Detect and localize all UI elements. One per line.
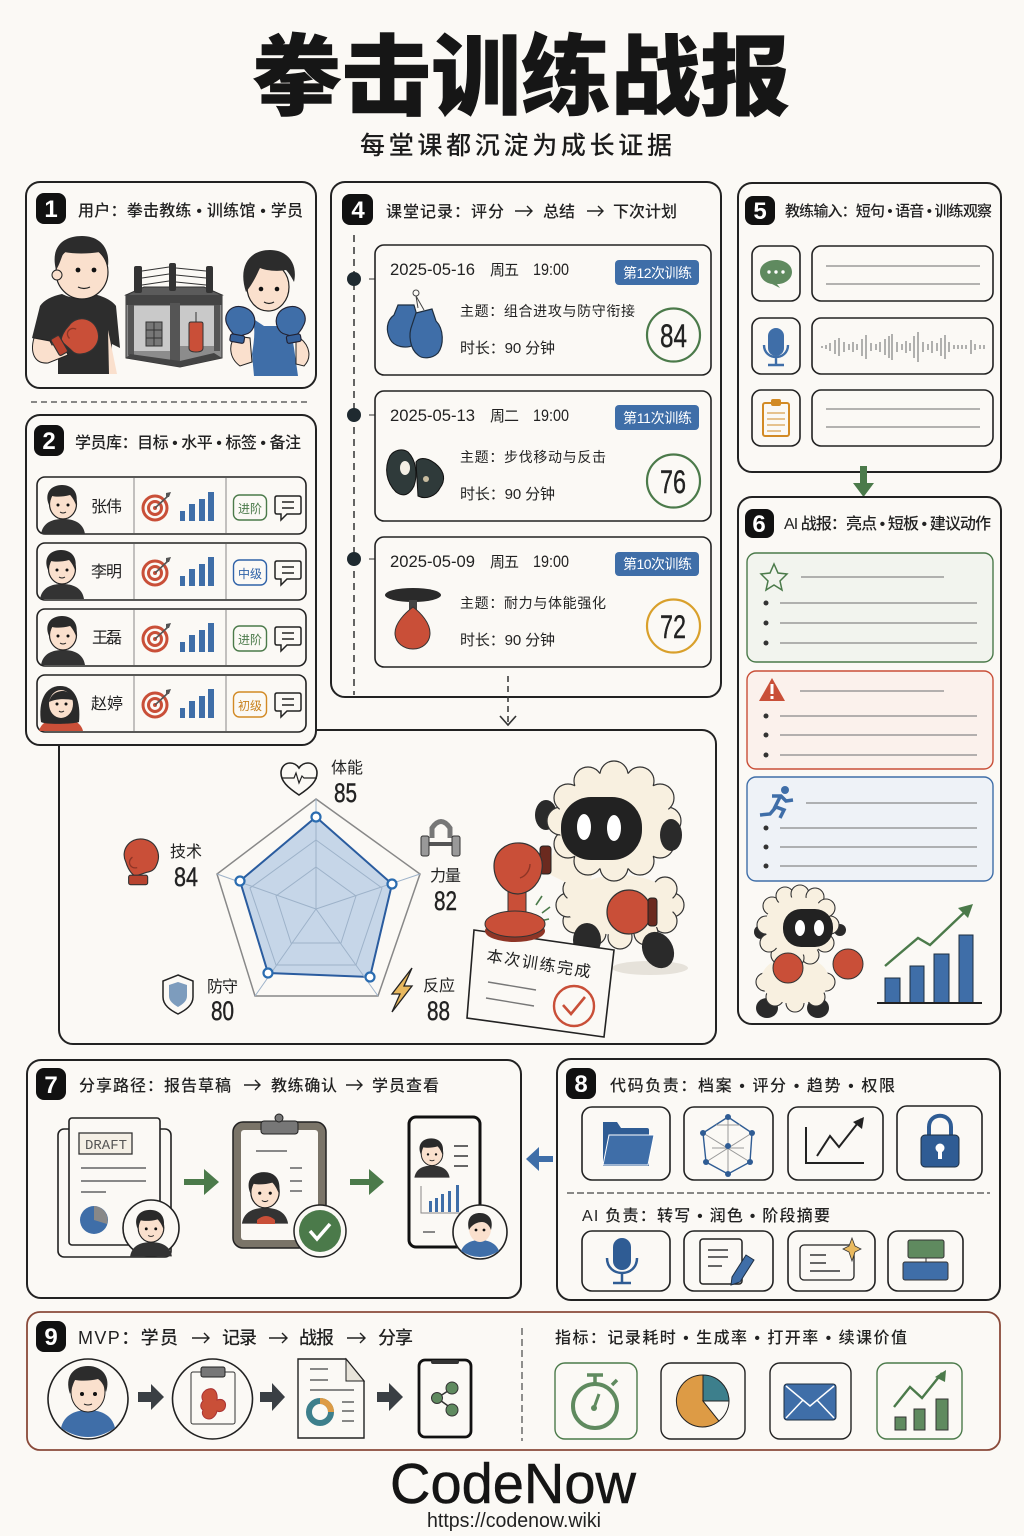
heading: MVP: 分享	[378, 1328, 413, 1348]
session card 10: 第10次训练	[623, 556, 692, 572]
badge 4: 4	[351, 197, 365, 224]
heading 1: 用户：拳击教练 • 训练馆 • 学员	[78, 201, 303, 220]
heading 6: AI 战报：亮点 • 短板 • 建议动作	[784, 515, 991, 533]
mascot: small sheep	[754, 885, 863, 1018]
panel 9: MVP and metrics	[27, 1312, 1000, 1450]
badge 9: 9	[44, 1324, 58, 1351]
student row: 赵婷: 初级	[238, 699, 262, 713]
heading: MVP	[78, 1328, 413, 1348]
badge 2: 2	[42, 428, 56, 455]
arrow	[350, 1169, 384, 1195]
chart: growth	[877, 904, 982, 1003]
badge 1	[36, 193, 66, 224]
icon: editing	[684, 1231, 773, 1291]
score 84: 84	[660, 318, 687, 354]
icon: polishing	[788, 1231, 875, 1291]
student row: 张伟	[37, 477, 306, 534]
card: weaknesses	[747, 671, 993, 769]
session card 10	[375, 537, 711, 667]
score 76: 76	[660, 464, 686, 500]
label: technique	[124, 839, 202, 892]
icon: report document	[298, 1359, 364, 1438]
student row: 赵婷: 赵婷	[91, 695, 123, 713]
heading 2: 学员库：目标 • 水平 • 标签 • 备注	[75, 433, 301, 452]
subtitle: 每堂课都沉淀为成长证据	[360, 132, 672, 160]
session card 12: 周五	[490, 262, 519, 279]
badge 1: 1	[44, 196, 58, 223]
panel 5: coach input	[738, 183, 1001, 472]
badge 5: 5	[753, 198, 767, 225]
icon: blue gloves	[387, 290, 442, 358]
heading: MVP: 战报	[299, 1328, 334, 1348]
arrow: records to radar	[500, 676, 516, 725]
student row: 李明	[37, 543, 306, 600]
badge 2	[34, 425, 64, 456]
student row: 张伟: 张伟	[91, 498, 122, 516]
badge 7: 7	[44, 1072, 58, 1099]
icon: lock	[897, 1106, 982, 1180]
session card 11: 19:00	[533, 406, 569, 425]
icon: stopwatch	[555, 1363, 637, 1439]
badge 8	[566, 1068, 596, 1099]
heading 7: 分享路径：报告草稿	[79, 1077, 231, 1095]
student row: 李明: 李明	[91, 563, 122, 581]
label: defense: 80	[211, 996, 234, 1026]
student row: 王磊	[37, 609, 306, 666]
session card 10: 周五	[490, 554, 519, 571]
student row: 赵婷	[37, 675, 306, 732]
session card 12: 时长：90 分钟	[460, 340, 555, 357]
badge 8: 8	[574, 1071, 588, 1098]
heading 7: 学员查看	[372, 1076, 439, 1095]
arrow	[184, 1169, 219, 1195]
timeline	[347, 235, 375, 695]
clipboard	[233, 1114, 346, 1257]
icon: focus pads	[387, 450, 444, 498]
icon: speed bag	[385, 588, 441, 649]
arrow	[138, 1384, 164, 1410]
badge 9	[36, 1321, 66, 1352]
label: stamina	[281, 759, 363, 808]
heading: metrics: 指标：记录耗时 • 生成率 • 打开率 • 续课价值	[555, 1329, 907, 1347]
draft document: DRAFT	[85, 1138, 127, 1154]
label: reaction	[392, 968, 455, 1026]
arrow: code to sharing	[526, 1147, 553, 1171]
arrow	[260, 1383, 285, 1411]
arrow	[377, 1383, 403, 1411]
label: stamina: 85	[334, 778, 357, 808]
label: technique: 84	[174, 862, 198, 892]
student row: 李明: 中级	[238, 566, 262, 581]
icon: microphone	[582, 1231, 670, 1291]
input: short text	[752, 246, 993, 301]
heading 5: 教练输入：短句 • 语音 • 训练观察	[785, 202, 992, 220]
icon: growth metric	[877, 1363, 962, 1439]
panel 4: class records	[331, 182, 721, 697]
student illustration	[226, 250, 309, 376]
heading 4: 总结	[543, 203, 575, 221]
icon: record clipboard	[172, 1359, 252, 1439]
badge 5	[745, 196, 775, 225]
label: power	[421, 822, 461, 916]
mascot: sheep stamping	[467, 761, 688, 1037]
badge 4	[342, 194, 373, 225]
heading: MVP: MVP：学员	[78, 1328, 178, 1348]
icon: stage summary	[888, 1231, 963, 1291]
heading 4: 课堂记录：评分	[386, 203, 504, 221]
input: voice	[752, 318, 993, 374]
label: power: 力量	[430, 867, 461, 885]
score 72	[647, 600, 700, 652]
brand url: https://codenow.wiki	[427, 1510, 601, 1532]
icon: pie	[661, 1363, 745, 1439]
label: technique: 技术	[170, 843, 202, 861]
badge 6: 6	[752, 511, 766, 538]
icon: folder	[582, 1107, 670, 1180]
session card 12: 主题：组合进攻与防守衔接	[460, 303, 635, 319]
badge 6	[745, 509, 774, 538]
panel 3: radar and mascot	[59, 730, 716, 1044]
heading: MVP: 记录	[222, 1328, 257, 1348]
icon: share phone	[419, 1360, 471, 1437]
label: power: 82	[434, 886, 457, 916]
session card 11	[375, 391, 711, 521]
phone report	[409, 1117, 507, 1259]
score 72: 72	[660, 609, 686, 645]
icon: trend	[788, 1107, 883, 1180]
draft document	[58, 1118, 179, 1257]
brand logo: CodeNow	[390, 1452, 637, 1516]
boxing ring	[126, 263, 222, 367]
heading 8: 代码负责：档案 • 评分 • 趋势 • 权限	[610, 1076, 895, 1095]
student row: 张伟: 进阶	[238, 502, 262, 516]
panel 7: sharing path	[27, 1060, 521, 1298]
heading 7	[79, 1076, 439, 1095]
heading 7: 教练确认	[271, 1077, 337, 1095]
session card 10: 时长：90 分钟	[460, 632, 555, 649]
radar chart	[217, 799, 420, 996]
icon: mail	[770, 1363, 851, 1439]
panel 8: responsibilities	[557, 1059, 1000, 1300]
label: defense	[163, 975, 238, 1026]
session card 12	[375, 245, 711, 375]
panel 6: AI report	[738, 497, 1001, 1024]
session card 11: 时长：90 分钟	[460, 486, 555, 503]
mascot: sheep stamping: 本次训练完成	[485, 947, 592, 981]
card: highlights	[747, 553, 993, 662]
panel 2: student library	[26, 415, 316, 745]
session card 10: 主题：耐力与体能强化	[460, 595, 606, 611]
panel 1: users	[26, 182, 316, 388]
coach illustration	[32, 236, 120, 374]
session card 12: 第12次训练	[623, 265, 692, 281]
student row: 王磊: 王磊	[92, 630, 122, 647]
heading: AI duties: AI 负责：转写 • 润色 • 阶段摘要	[582, 1206, 830, 1225]
badge 7	[36, 1068, 66, 1100]
icon: radar network	[684, 1107, 773, 1180]
arrow: input to AI report	[853, 466, 874, 497]
session card 11: 主题：步伐移动与反击	[460, 449, 606, 465]
score 76	[647, 454, 700, 508]
input: observation	[752, 390, 993, 446]
session card 11: 周二	[490, 408, 519, 425]
student row: 王磊: 进阶	[238, 633, 262, 647]
card: action suggestions	[747, 777, 993, 881]
icon: learner	[48, 1359, 128, 1439]
heading 4	[386, 203, 677, 221]
label: defense: 防守	[207, 978, 238, 996]
label: reaction: 88	[427, 996, 450, 1026]
title: 拳击训练战报	[252, 28, 790, 127]
session card 11: 2025-05-13	[390, 406, 475, 425]
session card 10: 19:00	[533, 552, 569, 571]
session card 12: 2025-05-16	[390, 260, 475, 279]
session card 12: 19:00	[533, 260, 569, 279]
label: stamina: 体能	[331, 759, 363, 777]
label: reaction: 反应	[423, 976, 455, 995]
session card 11: 第11次训练	[623, 410, 692, 426]
score 84	[647, 308, 700, 362]
session card 10: 2025-05-09	[390, 552, 475, 571]
heading 4: 下次计划	[613, 203, 677, 221]
